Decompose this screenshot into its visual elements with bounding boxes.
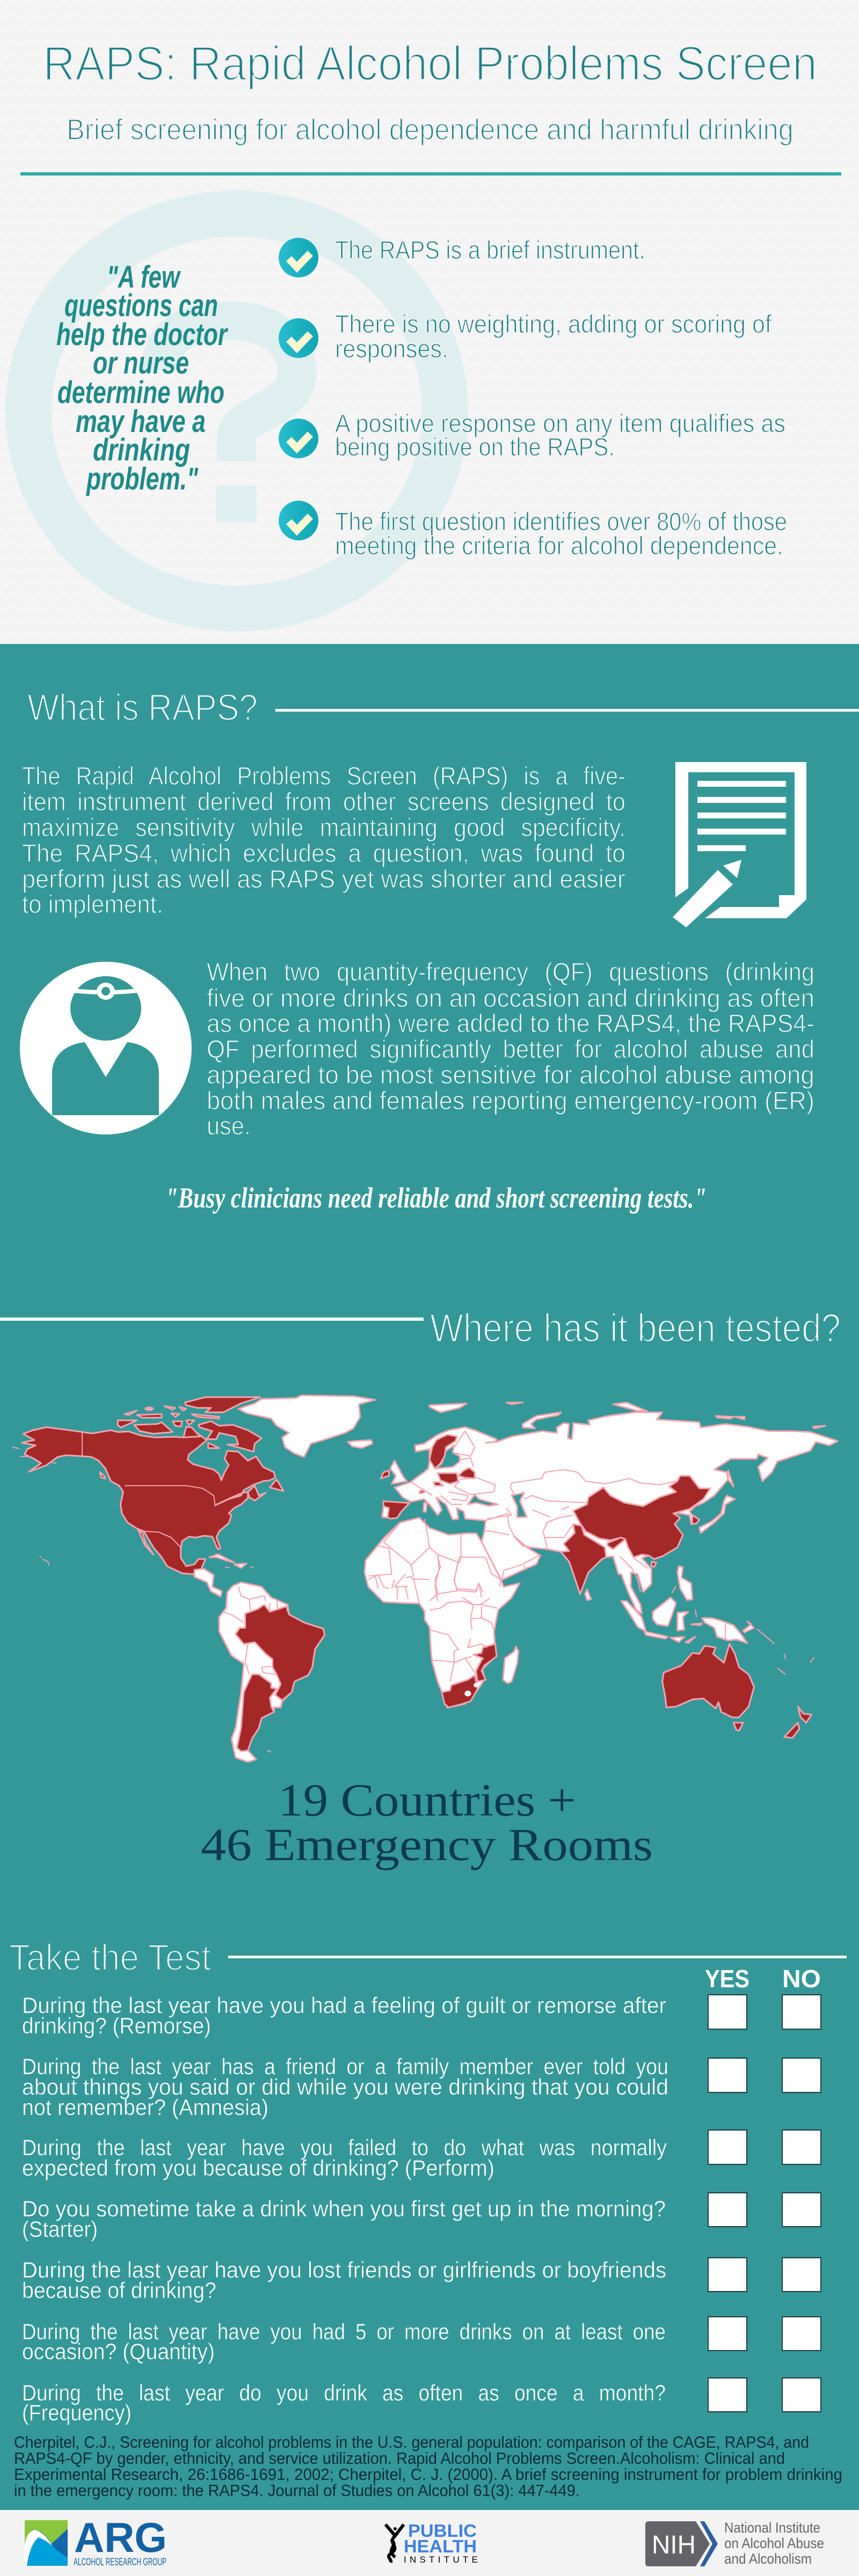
question 7 bbox=[22, 2380, 666, 2425]
logo: Public Health Institute: PUBLIC bbox=[408, 2521, 477, 2541]
citations: RAPS4-QF by gender, ethnicity, and service utilization. Rapid Alcohol Problems Screen.Alcoholism: Clinical and bbox=[14, 2449, 785, 2468]
question 6: During the last year have you had 5 or more drinks on at least one bbox=[22, 2319, 666, 2344]
logo: NIH: and Alcoholism bbox=[724, 2551, 812, 2567]
stat: 19 countries and 46 emergency rooms: 46 Emergency Rooms bbox=[201, 1819, 653, 1870]
stat: 19 countries and 46 emergency rooms bbox=[201, 1774, 653, 1870]
icon: check 3 bbox=[279, 419, 318, 458]
logo: Public Health Institute: HEALTH bbox=[404, 2536, 477, 2556]
title rule bbox=[20, 172, 841, 175]
text block: RAPS description: to implement. bbox=[22, 890, 163, 918]
question 6 bbox=[22, 2319, 666, 2364]
pull quote: a few questions: "A few bbox=[107, 260, 181, 295]
citations: Cherpitel, C.J., Screening for alcohol problems in the U.S. general population: comparison of the CAGE, RAPS4, and bbox=[14, 2433, 809, 2451]
text block: QF questions: five or more drinks on an occasion and drinking as often bbox=[207, 984, 814, 1012]
question 2 bbox=[22, 2054, 668, 2120]
question 7: During the last year do you drink as often as once a month? bbox=[22, 2380, 666, 2405]
question 5 bbox=[22, 2257, 666, 2303]
map: China bbox=[573, 1476, 710, 1559]
map: Sahel borders bbox=[368, 1574, 430, 1603]
bullet text 1: The RAPS is a brief instrument. bbox=[335, 236, 645, 264]
subtitle: Brief screening for alcohol dependence and harmful drinking bbox=[67, 113, 794, 146]
text block: QF questions: use. bbox=[207, 1111, 251, 1140]
logo: Public Health Institute bbox=[385, 2521, 478, 2565]
pull quote: busy clinicians: "Busy clinicians need reliable and short screening tests." bbox=[165, 1182, 707, 1214]
question 4 bbox=[22, 2196, 666, 2242]
text block: RAPS description: item instrument derived from other screens designed to bbox=[22, 787, 625, 816]
bullet text 4: The first question identifies over 80% of those bbox=[335, 507, 787, 536]
question 3 bbox=[22, 2135, 667, 2180]
question 1: drinking? (Remorse) bbox=[22, 2013, 211, 2038]
icon: check 4 bbox=[279, 501, 318, 540]
question 3: expected from you because of drinking? (Perform) bbox=[22, 2155, 494, 2180]
logo: NIH bbox=[645, 2520, 824, 2567]
bullet text 3: A positive response on any item qualifies as bbox=[335, 409, 785, 437]
question 5: During the last year have you lost friends or girlfriends or boyfriends bbox=[22, 2257, 666, 2282]
icon: doctor bbox=[20, 962, 192, 1135]
logo: NIH: NIH bbox=[652, 2531, 696, 2559]
heading: What is RAPS?: What is RAPS? bbox=[27, 686, 258, 728]
icon: large question mark watermark bbox=[28, 214, 445, 609]
pull quote: a few questions: may have a bbox=[76, 404, 206, 439]
logo: NIH: National Institute bbox=[724, 2520, 820, 2536]
map: South Africa, Mozambique, Madagascar bbox=[430, 1556, 814, 1738]
citations: Experimental Research, 26:1686-1691, 2002; Cherpitel, C. J. (2000). A brief screening instrument for problem drinking bbox=[14, 2465, 842, 2484]
bullet text 4 bbox=[335, 507, 787, 560]
logo: Alcohol Research Group: ALCOHOL RESEARCH GROUP bbox=[74, 2557, 166, 2568]
text block: RAPS description: The RAPS4, which excludes a question, was found to bbox=[22, 839, 625, 867]
question 5: because of drinking? bbox=[22, 2278, 216, 2303]
pull quote: a few questions: drinking bbox=[93, 433, 190, 467]
map: North-East African borders bbox=[430, 1533, 501, 1601]
map: Greenland and Iceland bbox=[238, 1395, 375, 1457]
map: North American borders bbox=[82, 1432, 215, 1547]
text block: QF questions: as once a month) were added to the RAPS4, the RAPS4- bbox=[207, 1009, 814, 1037]
pull quote: a few questions: determine who bbox=[57, 375, 224, 410]
world map bbox=[12, 1395, 838, 1762]
question 2: During the last year has a friend or a family member ever told you bbox=[22, 2054, 668, 2079]
logo: Alcohol Research Group: ARG bbox=[74, 2514, 167, 2561]
logo: Alcohol Research Group bbox=[25, 2514, 167, 2568]
text block: QF questions: both males and females reporting emergency-room (ER) bbox=[207, 1086, 814, 1115]
panel: footer background bbox=[0, 2510, 859, 2576]
panel: teal background bbox=[0, 644, 859, 2508]
map: India bbox=[561, 1524, 606, 1594]
question 3: During the last year have you failed to do what was normally bbox=[22, 2135, 667, 2160]
icon: check 2 bbox=[279, 318, 318, 358]
citations bbox=[14, 2433, 842, 2500]
map: Caribbean bbox=[209, 1554, 253, 1568]
map: Africa bbox=[365, 1518, 520, 1708]
text block: RAPS description bbox=[22, 762, 625, 918]
text block: QF questions bbox=[207, 957, 814, 1140]
question 1 bbox=[22, 1993, 666, 2038]
bullet text 2: There is no weighting, adding or scoring of bbox=[335, 310, 772, 338]
text block: QF questions: appeared to be most sensitive for alcohol abuse among bbox=[207, 1060, 814, 1089]
map: Southeast Asia islands bbox=[621, 1566, 814, 1674]
questionnaire bbox=[22, 1993, 821, 2425]
bullet text 3: being positive on the RAPS. bbox=[335, 433, 615, 461]
panel: intro background bbox=[0, 0, 859, 644]
map: South America bbox=[194, 1569, 325, 1762]
pull quote: a few questions: questions can bbox=[64, 288, 218, 323]
stat: 19 countries and 46 emergency rooms: 19 Countries + bbox=[278, 1774, 576, 1826]
question 4: Do you sometime take a drink when you first get up in the morning? bbox=[22, 2196, 666, 2221]
pull quote: a few questions bbox=[56, 260, 229, 496]
logo: Public Health Institute: INSTITUTE bbox=[404, 2555, 478, 2565]
heading: Take the Test: Take the Test bbox=[9, 1937, 211, 1978]
logo: NIH: on Alcohol Abuse bbox=[724, 2535, 824, 2551]
map: North America bbox=[22, 1427, 275, 1574]
text block: QF questions: QF performed significantly better for alcohol abuse and bbox=[207, 1035, 814, 1063]
map: Canadian Maritimes and Arctic islands bbox=[118, 1397, 283, 1501]
title: RAPS: Rapid Alcohol Problems Screen bbox=[43, 37, 817, 91]
text block: RAPS description: maximize sensitivity while maintaining good specificity. bbox=[22, 813, 625, 841]
map: African borders bbox=[430, 1556, 498, 1681]
icon: check 1 bbox=[279, 238, 318, 277]
question 7: (Frequency) bbox=[22, 2400, 132, 2425]
question 2: not remember? (Amnesia) bbox=[22, 2095, 268, 2120]
icon: document and pencil bbox=[673, 762, 806, 927]
question 1: During the last year have you had a feeling of guilt or remorse after bbox=[22, 1993, 666, 2018]
bullet list bbox=[279, 236, 787, 560]
map: Sweden, Poland, Belarus, Czechia, Korea bbox=[430, 1435, 457, 1469]
column labels: yes and no bbox=[705, 1965, 821, 1993]
map: South American borders bbox=[223, 1587, 278, 1752]
bullet text 3 bbox=[335, 409, 785, 461]
citations: in the emergency room: the RAPS4. Journal of Studies on Alcohol 61(3): 447-449. bbox=[14, 2481, 580, 2500]
text block: RAPS description: perform just as well as RAPS yet was shorter and easier bbox=[22, 865, 625, 893]
pull quote: a few questions: help the doctor bbox=[56, 317, 229, 352]
bullet text 4: meeting the criteria for alcohol dependence. bbox=[335, 531, 783, 560]
map: Eurasian borders bbox=[411, 1431, 676, 1592]
map: Australia and New Zealand bbox=[663, 1644, 754, 1717]
pull quote: a few questions: problem." bbox=[85, 462, 199, 496]
map: Alaska and Pacific islands bbox=[12, 1447, 154, 1565]
map: inland seas bbox=[435, 1445, 527, 1517]
question 2: about things you said or did while you were drinking that you could bbox=[22, 2074, 668, 2099]
map: Asian islands bbox=[430, 1402, 825, 1600]
text block: RAPS description: The Rapid Alcohol Problems Screen (RAPS) is a five- bbox=[22, 762, 625, 790]
map: France, Spain and Atlantic Europe bbox=[12, 1395, 427, 1574]
pull quote: a few questions: or nurse bbox=[93, 346, 189, 380]
question 4: (Starter) bbox=[22, 2216, 98, 2242]
question 6: occasion? (Quantity) bbox=[22, 2339, 215, 2364]
column labels: yes and no: YES bbox=[705, 1965, 749, 1993]
column labels: yes and no: NO bbox=[782, 1965, 821, 1993]
map: Eurasia bbox=[395, 1402, 838, 1614]
answer checkboxes bbox=[708, 1995, 821, 2412]
text block: QF questions: When two quantity-frequency (QF) questions (drinking bbox=[207, 957, 814, 986]
bullet text 2 bbox=[335, 310, 772, 363]
bullet text 2: responses. bbox=[335, 334, 448, 363]
map: West African borders bbox=[368, 1519, 430, 1578]
